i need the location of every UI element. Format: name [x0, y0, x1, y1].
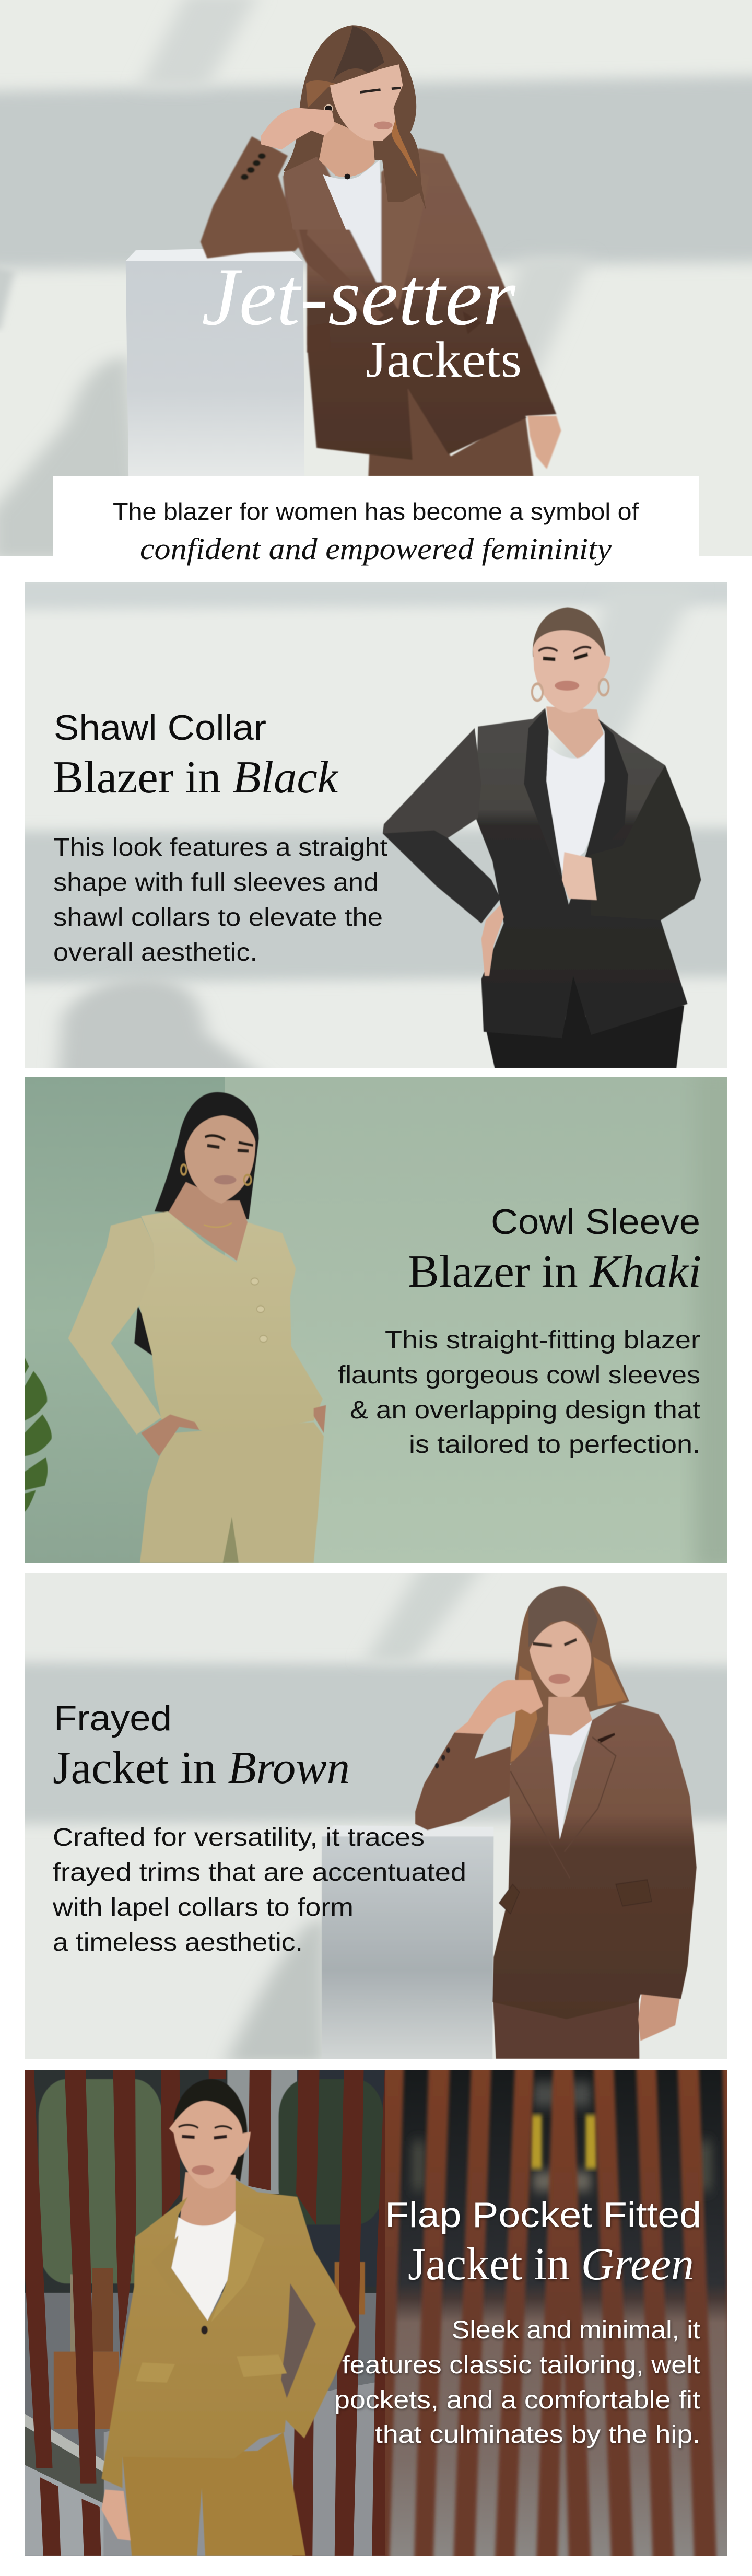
plant leaves [25, 1357, 52, 1512]
model in khaki blazer [25, 1092, 326, 1563]
panel: frayed jacket in brown [0, 1564, 752, 2064]
pendant [345, 174, 350, 179]
plinth [126, 248, 304, 476]
body text: shape with full sleeves and [53, 869, 379, 896]
blurred yellow shapes [531, 2115, 597, 2169]
jacket [283, 148, 556, 460]
neck [547, 1697, 592, 1737]
face [330, 64, 403, 141]
model with plinth [322, 1586, 697, 2059]
body text: This look features a straight [53, 834, 387, 861]
body text: with lapel collars to form [52, 1894, 354, 1921]
body text: Sleek and minimal, it [452, 2316, 700, 2344]
inner hand [562, 852, 597, 900]
heading: Jacket in Brown: Jacket in Brown [53, 1743, 350, 1793]
right lapel [586, 719, 628, 852]
body text: pockets, and a comfortable fit [334, 2386, 700, 2414]
pants [486, 1006, 684, 1068]
lips [374, 121, 393, 129]
tee [546, 1720, 592, 1839]
model head and hair [261, 25, 426, 230]
hero wall with soft shadows [0, 0, 752, 561]
necklace [204, 1223, 232, 1227]
sharp left background and model [25, 2070, 390, 2556]
lower hand [527, 416, 561, 469]
panel wall [0, 1564, 752, 2064]
torso [476, 708, 701, 1038]
white top [546, 733, 605, 871]
heading: Blazer in Black: Blazer in Black [53, 752, 339, 803]
buttons [251, 1278, 267, 1342]
body text: & an overlapping design that [350, 1396, 700, 1424]
face [533, 630, 610, 713]
earrings [181, 1164, 251, 1185]
left arm [383, 728, 500, 923]
body text [338, 1326, 700, 1459]
heading: Shawl Collar: Shawl Collar [54, 708, 266, 748]
intro caption box [53, 476, 699, 581]
body text [52, 1824, 466, 1956]
body text: This straight-fitting blazer [385, 1326, 700, 1354]
green wall [25, 1066, 742, 1572]
plinth [322, 1825, 494, 2059]
panel: cowl sleeve blazer in khaki [25, 1066, 742, 1572]
hair [508, 1586, 629, 1765]
raised hand [454, 1680, 543, 1734]
face [185, 1115, 255, 1204]
hair [284, 25, 426, 211]
raised hand [261, 108, 335, 149]
panel: hero [0, 0, 752, 581]
hoop earrings [532, 679, 609, 701]
hand [101, 2490, 131, 2540]
planter [54, 2268, 119, 2429]
right arm [589, 765, 701, 920]
lapel seams [511, 1737, 616, 1878]
intro line two: confident and empowered femininity [140, 532, 612, 566]
pocket flaps [136, 2362, 175, 2383]
left lapel [284, 157, 346, 230]
neck [319, 118, 375, 177]
neck [168, 1182, 248, 1261]
hero photo [0, 0, 752, 561]
eyes and brows [205, 1136, 253, 1146]
photo: mustard jacket model [25, 2064, 735, 2562]
cuff buttons [241, 153, 266, 180]
body text: features classic tailoring, welt [342, 2351, 700, 2379]
hand on hip [481, 905, 504, 976]
heading: Blazer in Khaki: Blazer in Khaki [408, 1246, 701, 1297]
blurred figures [412, 2082, 712, 2190]
face [169, 2101, 251, 2188]
lower hand [638, 1995, 680, 2041]
sleeve [68, 1218, 161, 1435]
wooden slats [25, 2070, 390, 2556]
neck [546, 706, 604, 759]
lips [548, 1674, 570, 1684]
jacket [492, 1703, 697, 2019]
pants [122, 2432, 306, 2556]
heading: Flap Pocket Fitted: Flap Pocket Fitted [385, 2195, 701, 2235]
photo: khaki blazer model [25, 1066, 742, 1572]
body text: that culminates by the hip. [375, 2421, 700, 2449]
lapel shading [382, 271, 406, 309]
hero title: Jet-setter: Jet-setter [202, 251, 516, 343]
body text: overall aesthetic. [53, 939, 257, 966]
pocket flaps [616, 1880, 652, 1906]
tee [170, 2211, 236, 2321]
blurred slats [376, 2064, 735, 2562]
photo: brown jacket model [0, 1564, 752, 2064]
hair [533, 607, 606, 657]
face [530, 1621, 591, 1698]
cuff buttons [435, 1747, 450, 1768]
neck [179, 2172, 236, 2234]
raised sleeve [415, 1732, 511, 1830]
skirt [368, 389, 533, 476]
body text: shawl collars to elevate the [53, 904, 383, 931]
rail [25, 2414, 109, 2503]
lips [555, 681, 579, 691]
eyes and brows [179, 2125, 232, 2129]
panel: shawl collar blazer in black [0, 575, 752, 1081]
model jacket and skirt [201, 136, 561, 476]
collar notch [598, 1734, 615, 1742]
background areas [25, 2070, 390, 2556]
model in mustard jacket [101, 2079, 356, 2556]
tee [322, 160, 380, 230]
pants [140, 1422, 324, 1563]
jacket body [139, 1211, 323, 1433]
body text: frayed trims that are accentuated [53, 1859, 466, 1886]
photo: black blazer model [0, 575, 752, 1081]
lapel [151, 2235, 207, 2321]
hero title: Jackets: Jackets [366, 332, 522, 388]
heading: Frayed: Frayed [54, 1698, 172, 1738]
panel: flap pocket fitted jacket in green [25, 2064, 735, 2562]
body text [334, 2316, 700, 2449]
hair [173, 2079, 247, 2181]
body text [53, 834, 387, 966]
eyes and brows [538, 647, 591, 652]
hair [155, 1092, 259, 1219]
body text: Crafted for versatility, it traces [53, 1824, 425, 1851]
blurred right background [362, 2064, 735, 2562]
jacket [101, 2180, 356, 2488]
tee lower [349, 182, 382, 283]
body text: flaunts gorgeous cowl sleeves [338, 1361, 700, 1389]
heading: Cowl Sleeve: Cowl Sleeve [491, 1202, 700, 1242]
foliage [39, 2079, 383, 2314]
skirt [493, 1988, 639, 2059]
body text: a timeless aesthetic. [53, 1929, 303, 1956]
hands [141, 1414, 199, 1456]
eyes [360, 88, 401, 92]
lips [214, 1175, 237, 1184]
eyes [533, 1640, 577, 1646]
body text: is tailored to perfection. [409, 1431, 700, 1459]
panel wall [0, 575, 752, 1081]
lips [192, 2165, 214, 2175]
model in black blazer [383, 607, 701, 1068]
arm gap [281, 2283, 316, 2398]
raised sleeve [201, 136, 300, 259]
pocket flap [306, 327, 309, 353]
intro line one: The blazer for women has become a symbol of [113, 498, 639, 525]
heading: Jacket in Green: Jacket in Green [408, 2239, 694, 2290]
earring [324, 105, 333, 112]
left lapel [524, 709, 563, 883]
button [201, 2326, 208, 2334]
